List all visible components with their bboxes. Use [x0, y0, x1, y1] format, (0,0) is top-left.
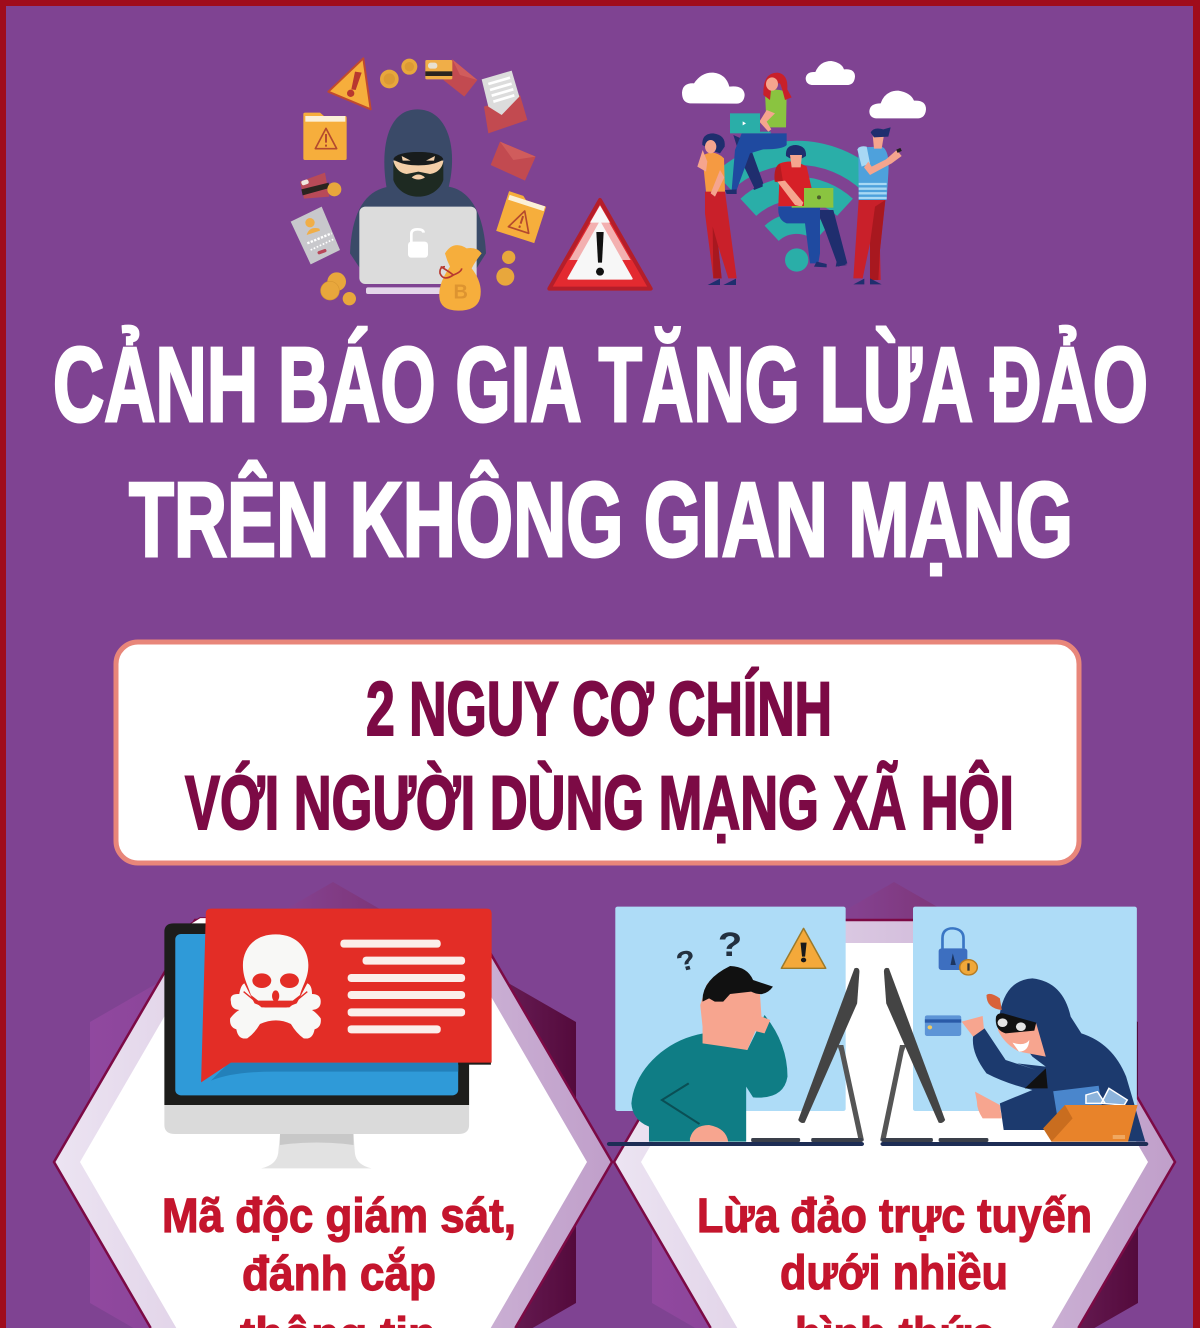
red alert bubble — [201, 909, 492, 1082]
hexagon inner right — [641, 943, 1148, 1328]
icon: open lock — [939, 928, 977, 975]
panel: online scam risk — [607, 882, 1175, 1328]
subtitle box — [116, 642, 1079, 863]
text: malware caption: Mã độc giám sát, — [162, 1190, 516, 1243]
icon: ID login card — [291, 207, 340, 264]
text: malware caption — [162, 1190, 516, 1328]
panel: malware risk — [54, 882, 612, 1328]
icon: skull and crossbones — [230, 934, 321, 1039]
screen panels — [615, 907, 846, 1111]
icon: coins bottom left — [321, 272, 356, 305]
icon: money bag: B — [453, 281, 468, 303]
desk lines — [607, 1142, 864, 1146]
title — [53, 325, 1148, 579]
figure: hooded scammer — [973, 978, 1145, 1142]
illustration: victim and scammer: ? — [673, 944, 700, 978]
text: online scam caption: Lừa đảo trực tuyến — [697, 1190, 1092, 1243]
figure: confused user — [631, 966, 787, 1142]
figure: woman with laptop — [725, 73, 792, 194]
monitors — [837, 1045, 864, 1141]
back hexagon right — [652, 882, 1138, 1328]
icon: coins bottom right — [496, 251, 515, 286]
icon: credit card — [925, 1015, 985, 1037]
figure: man with laptop seated on wifi — [774, 145, 847, 267]
hexagon frame right — [614, 920, 1175, 1328]
figure: woman on phone — [697, 133, 737, 285]
icon: hacker with stolen data — [291, 58, 651, 311]
icon: money bag — [439, 245, 482, 311]
icon: warning triangle — [328, 58, 371, 109]
icon: question marks: ? — [718, 924, 742, 963]
icon: wifi symbol — [723, 153, 870, 272]
text: online scam caption — [697, 1190, 1092, 1328]
icon: envelope — [491, 142, 536, 181]
icon: monitor with skull alert — [164, 909, 492, 1168]
text: online scam caption: dưới nhiều — [780, 1247, 1008, 1300]
icon: credit card small — [300, 173, 341, 199]
hexagon inner left — [80, 943, 587, 1328]
icon: box of stolen files — [1043, 1086, 1138, 1142]
icon: coins top — [380, 59, 417, 88]
icon: open envelope with document — [482, 71, 527, 133]
hexagon frame left — [54, 920, 612, 1328]
figure: man with phone — [853, 127, 902, 284]
hacker figure — [350, 109, 486, 273]
back hexagon left — [90, 882, 576, 1328]
illustration: victim and scammer — [607, 907, 1148, 1146]
icon: clouds — [682, 61, 926, 118]
icon: warning triangle small — [781, 928, 826, 968]
icon: folder left — [303, 113, 347, 160]
icon: large red warning triangle — [549, 200, 651, 289]
icon: laptop with open lock — [359, 207, 477, 294]
icon: credit card and envelope — [425, 59, 477, 97]
icon: people online around wifi — [682, 61, 926, 285]
text: malware caption: đánh cắp — [242, 1246, 436, 1301]
subtitle box: 2 NGUY CƠ CHÍNH — [366, 667, 832, 752]
icon: folder right — [496, 191, 547, 243]
